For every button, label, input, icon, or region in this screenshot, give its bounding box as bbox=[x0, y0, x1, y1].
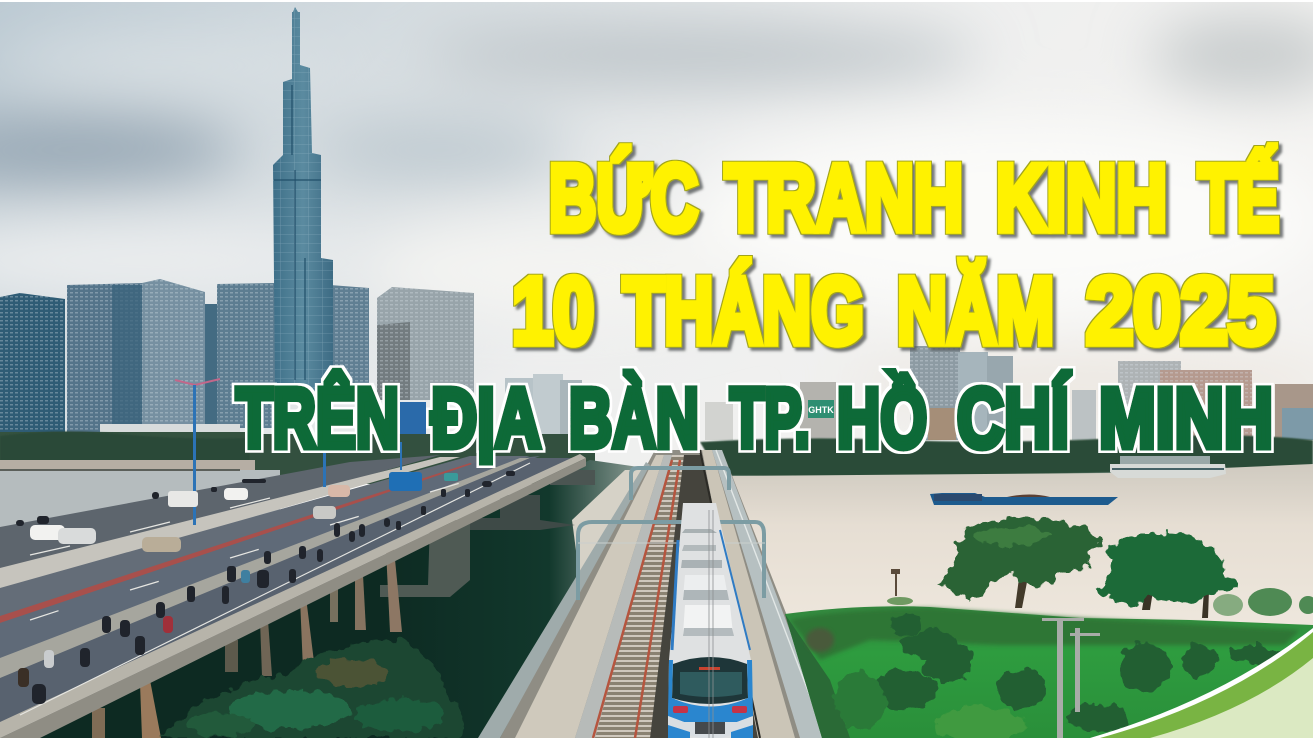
title line 2: THÁNG bbox=[623, 258, 864, 363]
title line 3: CHÍ bbox=[957, 371, 1071, 465]
second road bbox=[0, 456, 530, 628]
title line 1: KINH bbox=[996, 145, 1167, 250]
title line 3: HỒ bbox=[837, 371, 927, 465]
road bridge deck bbox=[0, 454, 586, 738]
green riverside land bbox=[785, 606, 1313, 738]
lamp posts bbox=[193, 385, 402, 525]
windshield bbox=[672, 657, 748, 704]
second acacia tree bbox=[1094, 533, 1237, 618]
power poles bbox=[1042, 618, 1100, 738]
title line 3 bbox=[236, 371, 1273, 465]
far skyline right: GHTK bbox=[808, 405, 834, 415]
title line 2: 10 bbox=[512, 258, 594, 363]
blue front band bbox=[668, 660, 753, 722]
barrier bbox=[0, 457, 460, 590]
motorbikes bbox=[16, 471, 515, 704]
outer rail and edge bbox=[0, 454, 586, 738]
metro viaduct bbox=[478, 450, 857, 738]
title line 2: NĂM bbox=[897, 258, 1054, 363]
red median bbox=[0, 463, 474, 623]
viaduct base bbox=[500, 450, 835, 738]
title line 1 bbox=[549, 145, 1279, 250]
third road bbox=[0, 456, 540, 668]
vehicles bbox=[30, 472, 458, 552]
barge bbox=[930, 493, 1118, 505]
title line 1: TRANH bbox=[725, 145, 963, 250]
landmark tower bbox=[273, 7, 333, 392]
left fence bbox=[478, 462, 650, 738]
title line 3: TRÊN bbox=[236, 371, 399, 465]
title line 2 bbox=[512, 258, 1275, 363]
title bbox=[236, 145, 1279, 465]
trackbed bbox=[595, 455, 684, 738]
title line 1: BỨC bbox=[549, 145, 698, 250]
title line 2: 2025 bbox=[1086, 258, 1275, 363]
distant shrubs bbox=[887, 569, 1313, 616]
metro train bbox=[668, 503, 753, 738]
concrete barrier bbox=[0, 458, 530, 680]
right fence bbox=[712, 450, 830, 738]
left walkway bbox=[515, 455, 664, 738]
far skyline right bbox=[505, 346, 1313, 441]
title line 3: BÀN bbox=[569, 371, 699, 465]
tree line along far bank bbox=[0, 431, 1313, 484]
near road bbox=[0, 458, 578, 730]
main river bbox=[725, 464, 1313, 640]
dark river beneath bridge bbox=[0, 460, 660, 738]
cruise boat bbox=[1110, 456, 1226, 478]
title line 3: TP. bbox=[730, 371, 810, 465]
large acacia tree bbox=[938, 518, 1100, 608]
lane markings bbox=[20, 463, 530, 715]
low buildings and riverside structures bbox=[100, 379, 426, 438]
overhead gantries bbox=[578, 468, 765, 600]
apartment towers left bbox=[0, 279, 474, 432]
lawn trees bbox=[834, 615, 1283, 738]
corner swoosh bbox=[1090, 628, 1313, 738]
sky with clouds bbox=[0, 0, 1313, 480]
title line 3: MINH bbox=[1099, 371, 1273, 465]
bridge piers bbox=[92, 470, 595, 738]
foliage under bridge bbox=[160, 640, 463, 738]
title line 3: ĐỊA bbox=[431, 371, 541, 465]
top road bbox=[0, 455, 440, 580]
right walkway bbox=[702, 450, 795, 738]
cable trough bbox=[575, 455, 672, 738]
left river bbox=[0, 460, 280, 550]
